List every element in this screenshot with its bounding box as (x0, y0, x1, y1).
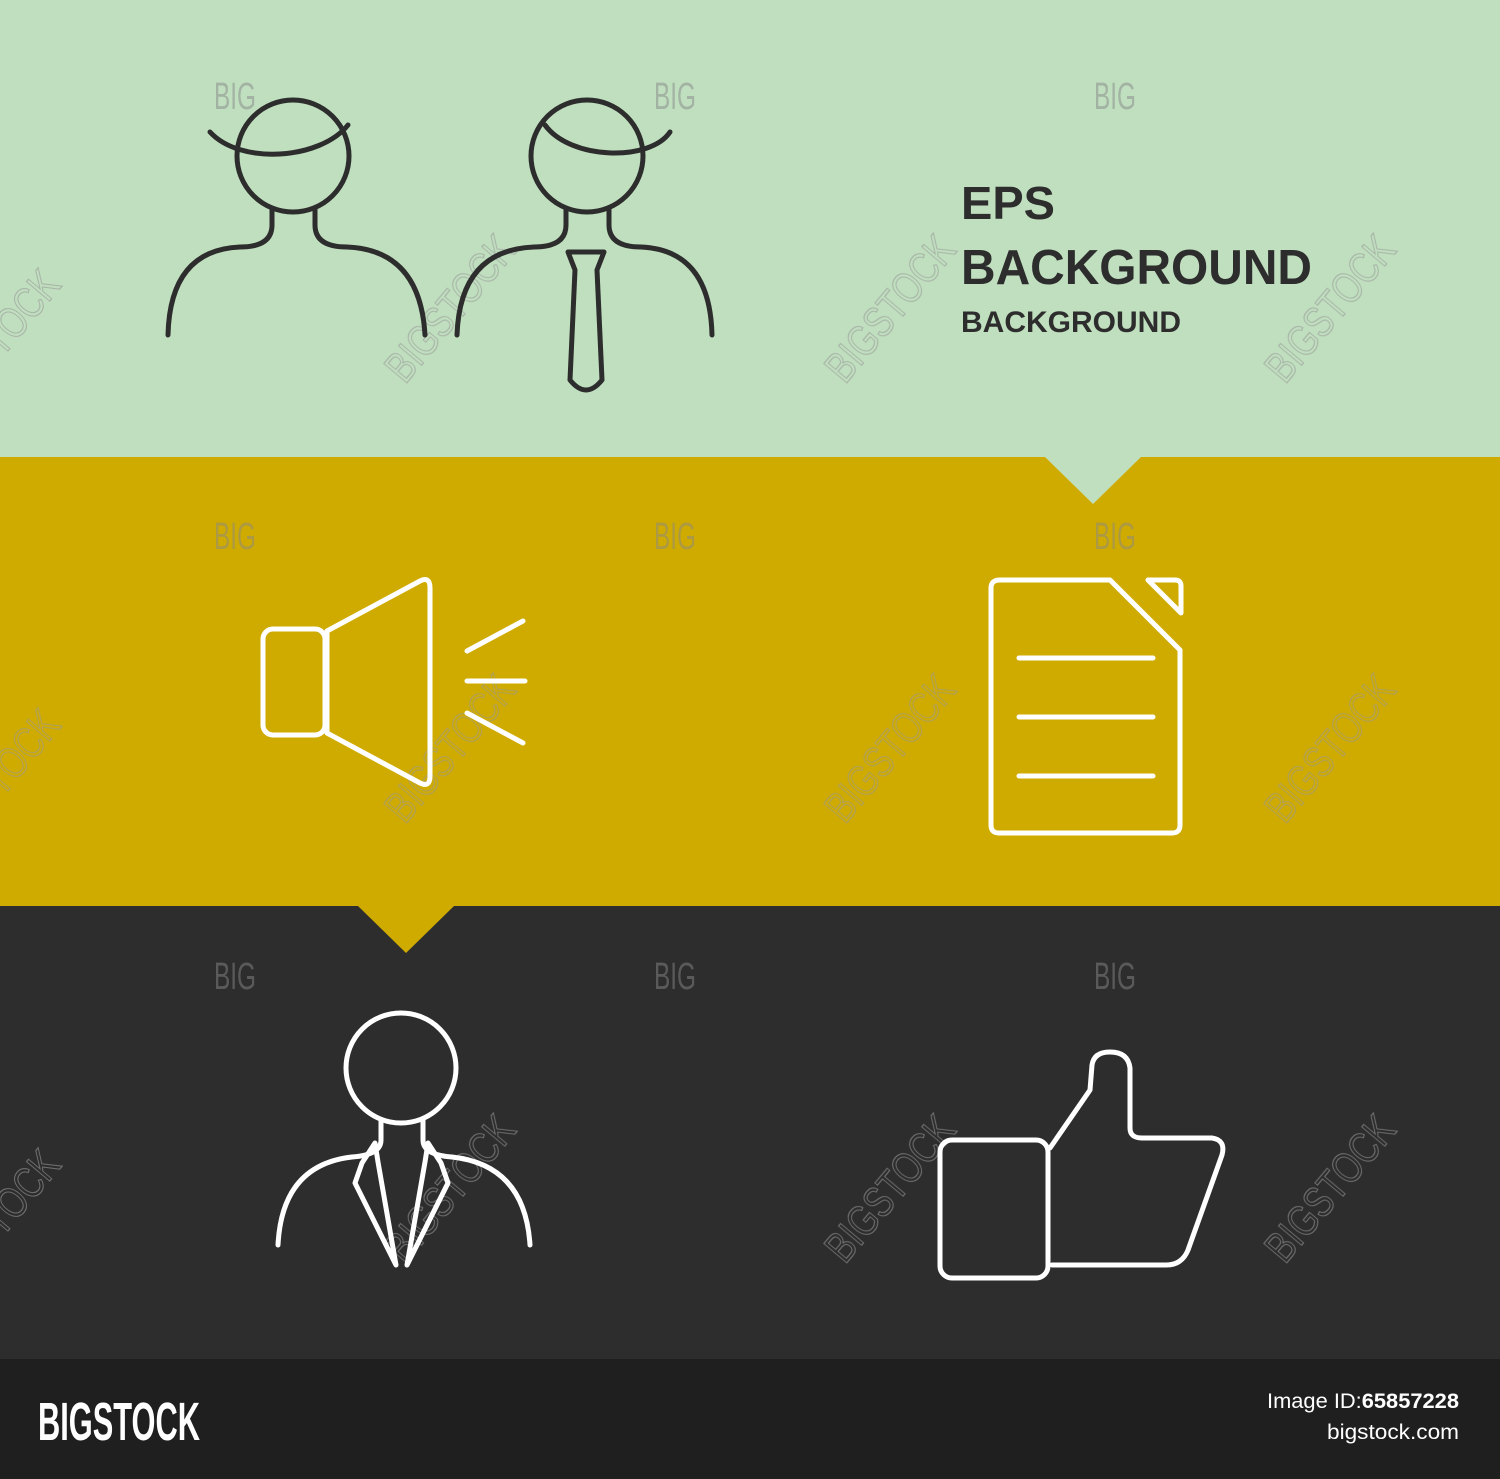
icon: thumbs up (940, 1052, 1223, 1278)
watermark BIG labels: BIG (214, 76, 256, 118)
icon: speaker (263, 580, 525, 784)
watermark BIGSTOCK rotated: BIGSTOCK (375, 226, 525, 391)
watermark BIG labels: BIG (654, 956, 696, 998)
watermark BIGSTOCK rotated: BIGSTOCK (815, 666, 965, 831)
footer: image id (1267, 1390, 1459, 1444)
panel: dark band (0, 906, 1500, 1359)
watermark BIGSTOCK rotated: BIGSTOCK (815, 226, 965, 391)
title text: BACKGROUND (961, 241, 1312, 295)
watermark BIGSTOCK rotated: BIGSTOCK (815, 1106, 965, 1271)
pointer: green triangle (1045, 457, 1141, 504)
title text: EPS (961, 177, 1055, 229)
watermark BIGSTOCK rotated (0, 226, 1405, 1306)
footer: image id: bigstock.com (1327, 1421, 1459, 1444)
footer: image id: Image ID:65857228 (1267, 1390, 1459, 1413)
watermark BIGSTOCK rotated: BIGSTOCK (375, 666, 525, 831)
footer: logo: BIGSTOCK (38, 1392, 200, 1452)
watermark BIG labels: BIG (1094, 76, 1136, 118)
panel: gold band (0, 457, 1500, 906)
watermark BIG labels: BIG (654, 516, 696, 558)
watermark BIG labels: BIG (654, 76, 696, 118)
watermark BIG labels: BIG (1094, 956, 1136, 998)
watermark BIG labels: BIG (214, 956, 256, 998)
icon: two people (168, 100, 712, 390)
icon: businessman (278, 1013, 530, 1265)
watermark BIG labels: BIG (214, 516, 256, 558)
footer bar (0, 1359, 1500, 1479)
panel: green band (0, 0, 1500, 457)
watermark BIG labels: BIG (1094, 516, 1136, 558)
pointer: gold triangle (358, 906, 454, 953)
watermark BIGSTOCK rotated: BIGSTOCK (1255, 1106, 1405, 1271)
watermark BIGSTOCK rotated: BIGSTOCK (1255, 666, 1405, 831)
watermark BIGSTOCK rotated: BIGSTOCK (1255, 226, 1405, 391)
title text (961, 177, 1312, 339)
watermark BIG labels (214, 76, 1136, 998)
title text: BACKGROUND (961, 306, 1181, 339)
watermark BIGSTOCK rotated: BIGSTOCK (375, 1106, 525, 1271)
icon: document (991, 580, 1181, 833)
